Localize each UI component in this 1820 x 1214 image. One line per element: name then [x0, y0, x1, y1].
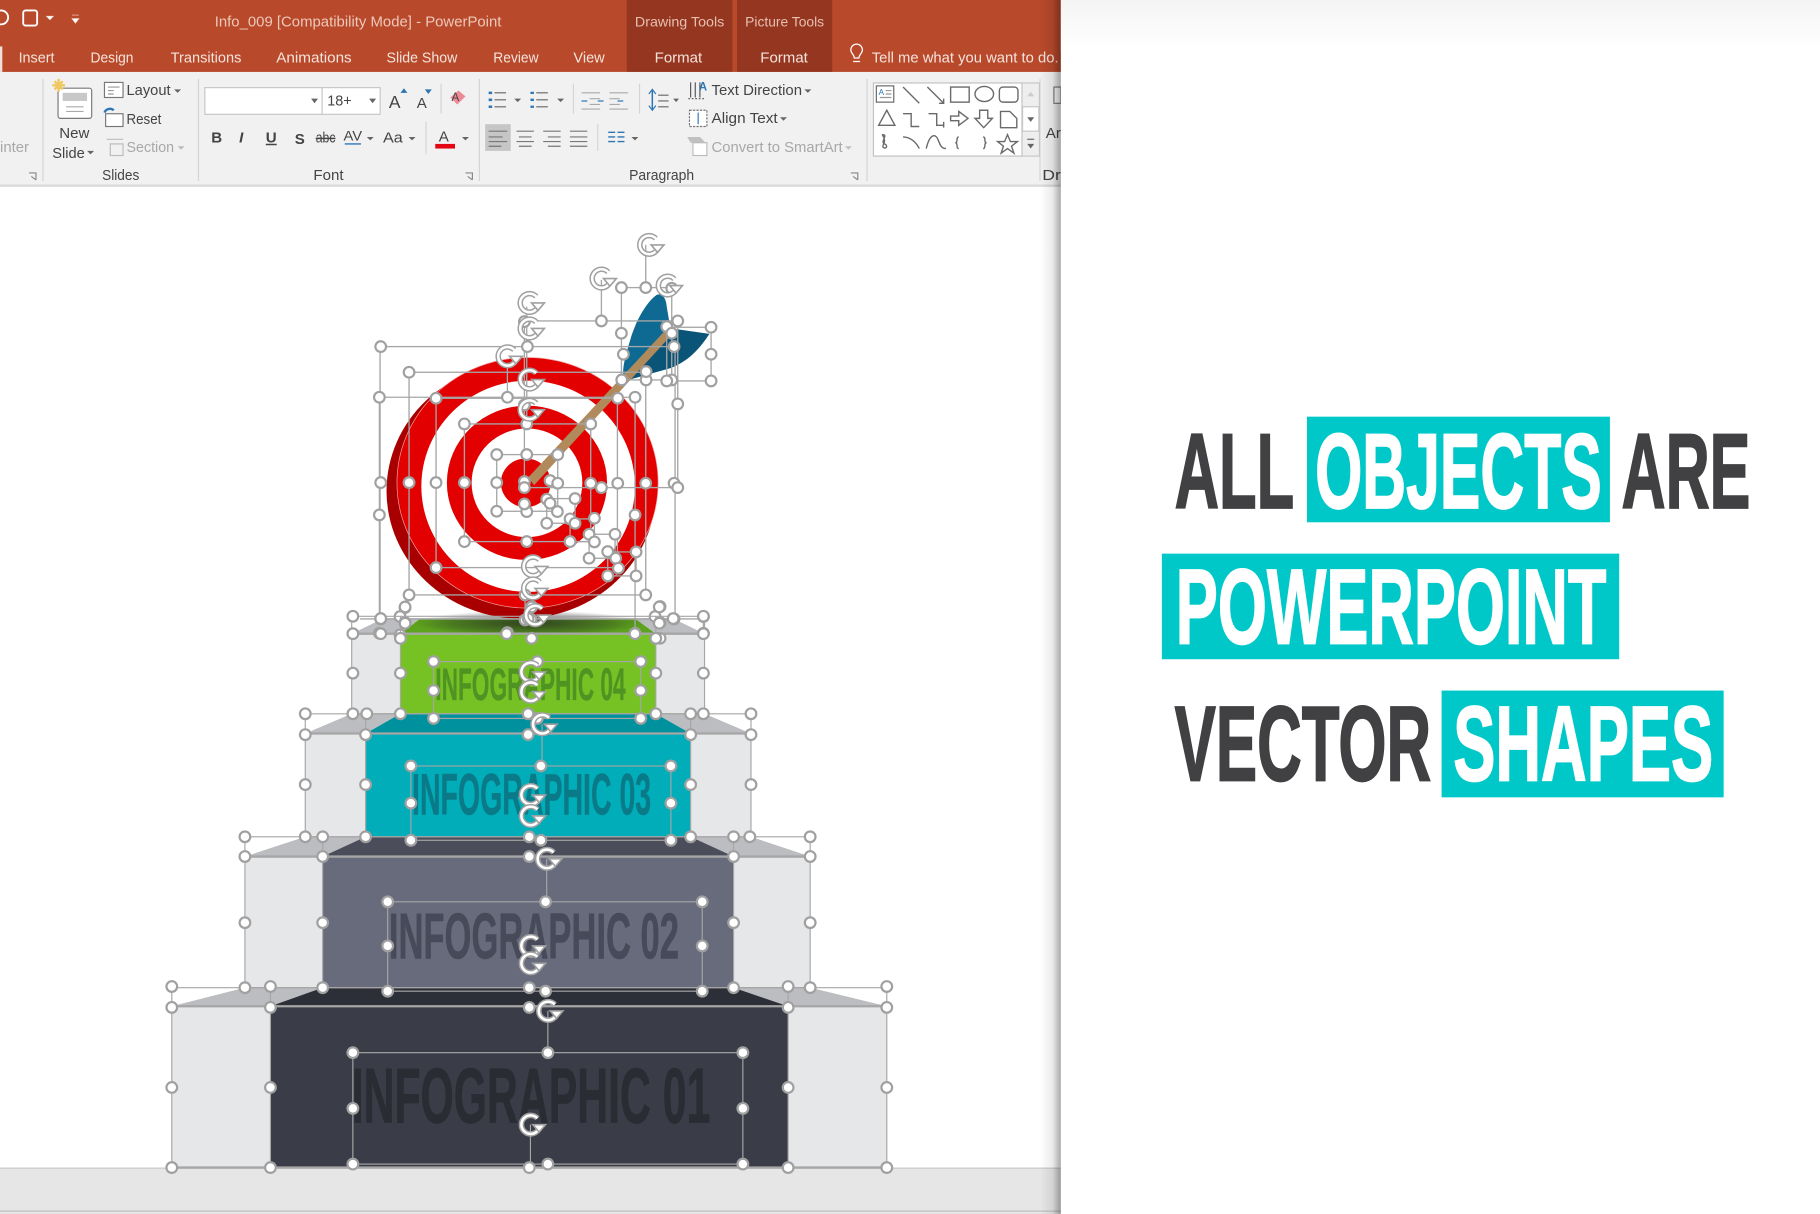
group: font: AV: [344, 127, 363, 143]
group: font: A: [452, 91, 460, 104]
group: slides: Layout: [127, 82, 171, 99]
tier 3: [305, 714, 751, 837]
tier 2: INFOGRAPHIC 02: [389, 900, 679, 973]
group: slides: inter: [0, 139, 29, 156]
group: font: S: [295, 131, 305, 148]
heading line 3: VECTOR: [1175, 684, 1431, 804]
ground strip: [0, 1168, 1061, 1214]
ribbon: [0, 72, 1061, 187]
title bar and tabs: [0, 0, 1061, 72]
group: font: U: [266, 130, 277, 147]
title bar and tabs: Animations: [276, 50, 352, 67]
title bar and tabs: Tell me what you want to do.: [872, 50, 1059, 67]
title bar and tabs: Drawing Tools: [635, 14, 724, 30]
group: font: A: [417, 95, 428, 112]
selection frames and handles: pyramid: [166, 602, 892, 1173]
panel: right text area: [1061, 0, 1820, 1214]
group: paragraph: [485, 81, 858, 184]
group: shapes gallery: Ar: [1046, 125, 1061, 142]
group: shapes gallery: Dr: [1042, 167, 1061, 184]
pyramid: [172, 619, 887, 1168]
title bar and tabs: View: [573, 50, 605, 67]
group: font: A: [439, 129, 450, 146]
group: slides: Slides: [102, 167, 139, 184]
group: slides: Slide: [52, 145, 85, 162]
heading line 1: ALL: [1175, 411, 1294, 531]
group: paragraph: Align Text: [712, 110, 778, 127]
title bar and tabs: Picture Tools: [745, 14, 824, 30]
group: font: 18+: [327, 93, 352, 110]
title bar and tabs: Format: [655, 50, 703, 67]
panel: PowerPoint window: [0, 0, 1061, 1214]
title bar and tabs: Info_009 [Compatibility Mode] - PowerPoint: [215, 14, 502, 31]
slide canvas: [0, 186, 1061, 1168]
tier 2: [245, 837, 810, 988]
title bar and tabs: Format: [760, 50, 809, 67]
group: paragraph: Text Direction: [712, 82, 802, 99]
group: font: I: [239, 130, 244, 147]
icon: arrow: [528, 294, 709, 485]
group: slides: [0, 79, 185, 184]
icon: red bullseye target: [387, 357, 658, 619]
group: shapes gallery: [873, 83, 1061, 184]
group: font: Font: [313, 167, 344, 184]
title bar and tabs: Insert: [19, 50, 55, 67]
group: paragraph: A: [699, 81, 708, 94]
window edge shadow: [1040, 0, 1061, 1214]
tier 1: [172, 988, 887, 1168]
heading line 2: [1162, 547, 1619, 667]
group: slides: New: [59, 125, 89, 142]
title bar and tabs: Design: [91, 50, 133, 67]
group: shapes gallery: A: [879, 88, 885, 97]
title bar and tabs: Review: [493, 50, 539, 67]
group: font: B: [211, 130, 222, 147]
tier 4: [352, 619, 705, 714]
group: paragraph: Convert to SmartArt: [712, 139, 843, 156]
selection frames and handles: target and arrow: [360, 245, 716, 644]
group: font: A: [389, 92, 401, 112]
group: paragraph: Paragraph: [629, 167, 694, 184]
rotation handles: [498, 236, 682, 1134]
heading line 1: [1175, 411, 1750, 531]
icon: target shadow: [413, 610, 645, 636]
group: font: abc: [316, 130, 336, 147]
group: slides: Reset: [127, 111, 162, 128]
group: font: Aa: [383, 130, 403, 147]
title bar and tabs: Slide Show: [387, 50, 457, 67]
tier 1: INFOGRAPHIC 01: [352, 1053, 710, 1139]
group: slides: Section: [127, 139, 174, 156]
title bar and tabs: Transitions: [171, 50, 241, 67]
tier 3: INFOGRAPHIC 03: [412, 763, 651, 828]
heading line 1: OBJECTS: [1315, 411, 1602, 531]
tier 4: INFOGRAPHIC 04: [435, 659, 626, 710]
group: font: [205, 84, 472, 184]
